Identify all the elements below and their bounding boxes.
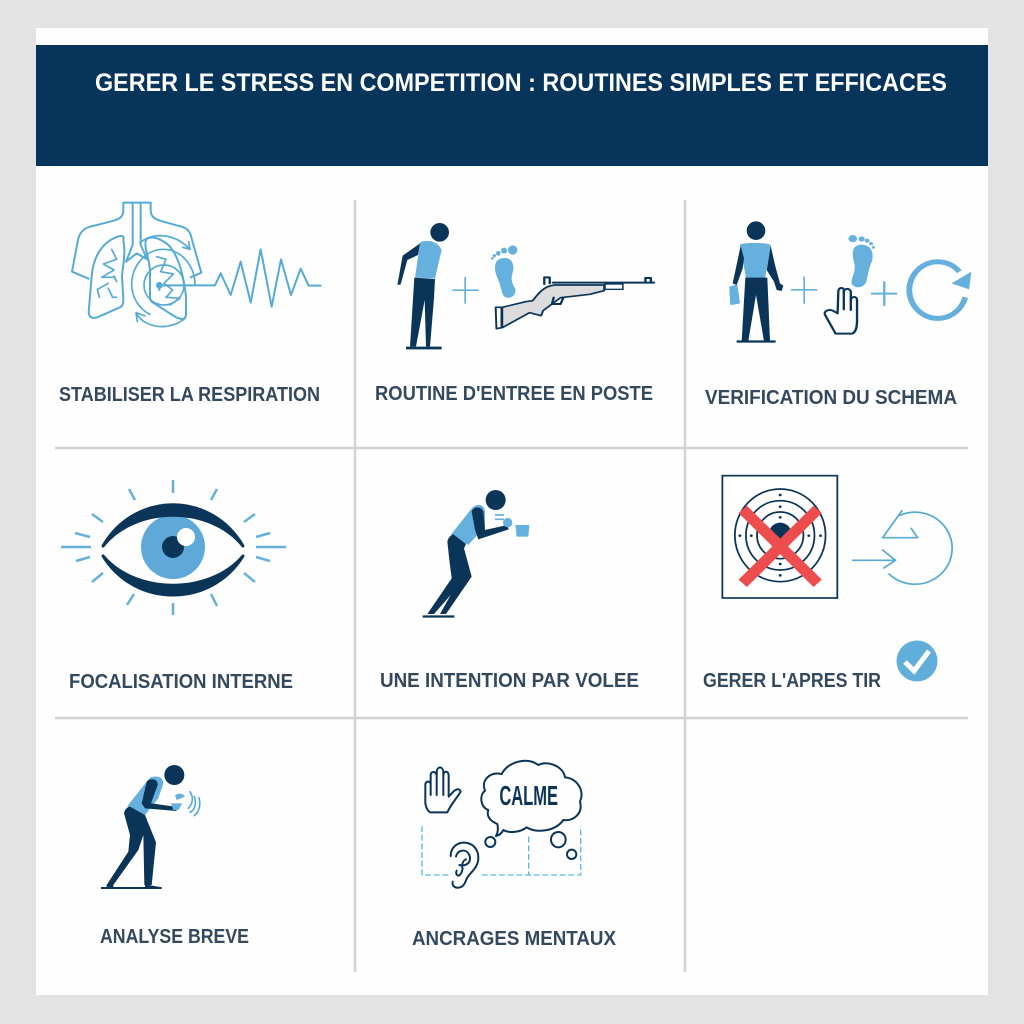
panel: analyse breve: [100, 765, 249, 948]
title: GERER LE STRESS EN COMPETITION : ROUTINES SIMPLES ET EFFICACES: [95, 69, 947, 97]
panel: gerer l'apres tir: [703, 476, 952, 692]
label: UNE INTENTION PAR VOLEE: [380, 670, 639, 692]
icon: standing shooter, foot and plus: [397, 223, 517, 349]
icon: bent figure with cup: [423, 490, 529, 618]
panel: verification du schema: [705, 221, 971, 409]
icon: standing figure with bottle: [729, 221, 817, 343]
panel: stabiliser la respiration: [59, 203, 321, 406]
header banner: [36, 45, 988, 166]
icon: eye: [61, 480, 286, 615]
icon: hand, ear, thought bubble: CALME: [499, 780, 558, 811]
icon: bent figure analysing: [101, 765, 200, 889]
label: GERER L'APRES TIR: [703, 670, 881, 692]
icon: foot, hand and cycle: [825, 235, 971, 334]
panel: routine d'entree en poste: [375, 223, 654, 405]
panel: une intention par volee: [380, 490, 639, 692]
icon: return arrow cycle: [853, 511, 952, 584]
icon: crossed-out target: [722, 476, 837, 598]
panel: focalisation interne: [61, 480, 293, 693]
icon: rifle: [496, 277, 654, 329]
icon: lungs with waveform: [72, 203, 321, 327]
label: STABILISER LA RESPIRATION: [59, 384, 320, 406]
label: ANALYSE BREVE: [100, 926, 249, 948]
icon: check badge: [896, 640, 938, 682]
panel: ancrages mentaux: [412, 761, 617, 950]
label: FOCALISATION INTERNE: [69, 671, 293, 693]
label: VERIFICATION DU SCHEMA: [705, 387, 957, 409]
label: ANCRAGES MENTAUX: [412, 928, 617, 950]
label: ROUTINE D'ENTREE EN POSTE: [375, 383, 653, 405]
icon: hand, ear, thought bubble: [422, 761, 581, 888]
